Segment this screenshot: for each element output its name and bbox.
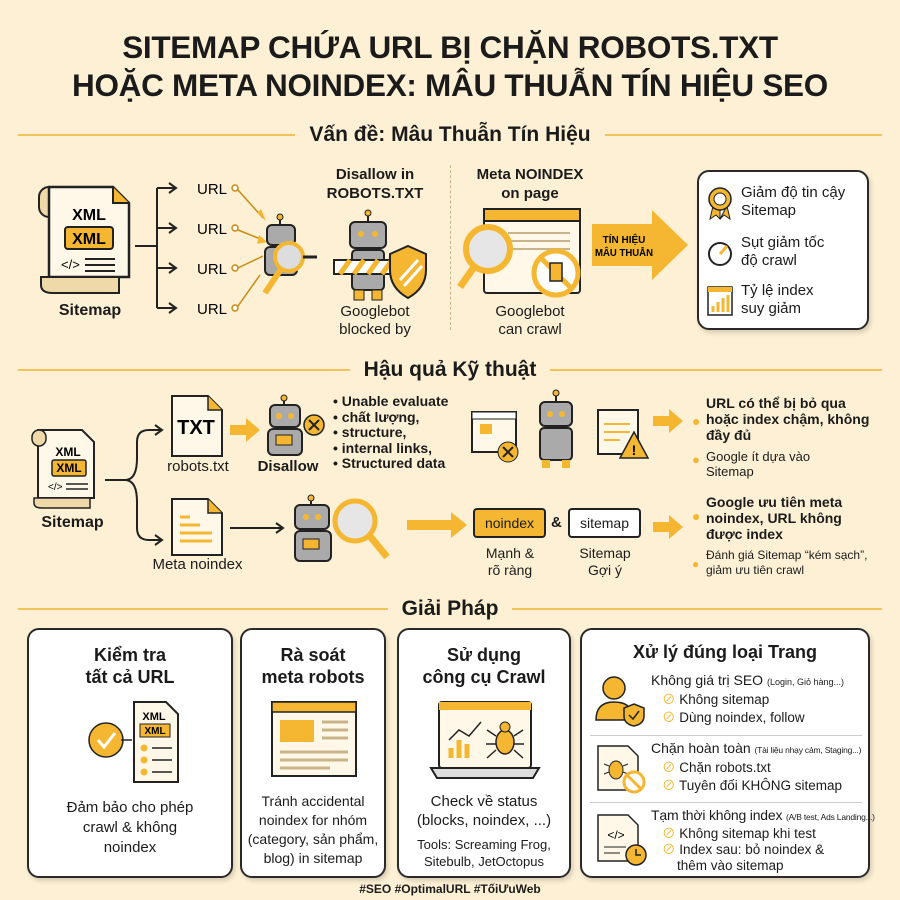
arrow thin [230, 522, 285, 534]
row: no SEO value: ⊘ Không sitemap [662, 692, 769, 707]
text: consequence 1: ● [692, 413, 700, 429]
row: no SEO value: Không giá trị SEO (Login, Giỏ hàng...) [651, 672, 844, 688]
heading: meta noindex on page: on page [501, 185, 559, 202]
item: trust [708, 184, 846, 220]
icon: robot with pages [471, 390, 650, 468]
icon: robot with pages: ! [632, 442, 636, 458]
icon: check file [88, 701, 179, 783]
label: googlebot blocked by: Googlebot [340, 303, 410, 320]
heading [85, 645, 174, 687]
item: index rate: Tỷ lệ index [741, 282, 814, 299]
label: Sitemap: Sitemap [59, 302, 121, 319]
icon: meta noindex doc [171, 498, 223, 556]
icon: laptop with spider [429, 700, 541, 785]
tools: Tools: Screaming Frog, [417, 837, 551, 852]
icon: sitemap scroll: </> [61, 257, 80, 272]
tools: Sitebulb, JetOctopus [424, 854, 544, 869]
icon: robot with magnifier [294, 494, 390, 562]
text: consequence 2 [692, 494, 867, 577]
text: consequence 1: URL có thể bị bỏ qua hoặc index chậm, không đầy đủ [706, 395, 869, 443]
list: unable to evaluate: • Unable evaluate [333, 393, 448, 409]
text: consequence 1: Google ít dựa vào Sitemap [706, 449, 810, 479]
row: block completely [582, 738, 868, 800]
label: strong clear [486, 545, 534, 578]
heading: Kiểm tra [94, 645, 166, 665]
row: temporary noindex: ⊘ Không sitemap khi test [662, 826, 816, 841]
heading: disallow in robots.txt: Disallow in [336, 166, 414, 183]
text: Đảm bảo cho phép [67, 799, 193, 816]
list: unable to evaluate: • structure, [333, 424, 406, 440]
icon: check file: XML [144, 726, 166, 737]
icon: sitemap scroll [38, 186, 130, 294]
badge: noindex [473, 508, 546, 538]
item: index rate: suy giảm [741, 300, 801, 317]
icon: sitemap small: </> [48, 482, 63, 493]
label: strong clear: Mạnh & [486, 545, 534, 561]
row: block completely: Chặn hoàn toàn (Tài liệu nhạy cảm, Staging...) [651, 740, 861, 756]
text: noindex [104, 839, 156, 856]
item: crawl speed [708, 234, 824, 269]
heading: tất cả URL [85, 667, 174, 687]
list: unable to evaluate: • internal links, [333, 440, 432, 456]
text: consequence 1 [692, 395, 869, 479]
badge: sitemap: sitemap [580, 515, 629, 531]
text: Tránh accidental noindex for nhóm (category, sản phẩm, blog) in sitemap [248, 793, 378, 866]
arrows: url branches [135, 181, 266, 318]
text: (blocks, noindex, ...) [417, 812, 551, 829]
panel: handle page types [580, 628, 870, 878]
item: crawl speed: Sụt giảm tốc [741, 234, 824, 251]
icon: page layout [271, 701, 357, 777]
label: googlebot can crawl: Googlebot [495, 303, 565, 320]
icon: small robot with magnifier [262, 214, 317, 294]
arrows: url branches: URL [197, 261, 227, 278]
text: consequence 2: ● [692, 557, 699, 571]
section heading: problem: Vấn đề: Mâu Thuẫn Tín Hiệu [309, 123, 591, 146]
heading: meta robots [261, 667, 365, 687]
row: temporary noindex: ⊘ Index sau: bỏ noindex & [662, 842, 824, 857]
label: googlebot blocked by: blocked by [339, 321, 411, 338]
item: trust: Giảm độ tin cậy [741, 184, 845, 201]
heading: Sử dụng [447, 645, 521, 665]
text: crawl & không [83, 819, 177, 836]
title: HOẶC META NOINDEX: MÂU THUẪN TÍN HIỆU SEO [72, 67, 828, 103]
icon: txt file: TXT [177, 417, 215, 439]
icon: browser with magnifier and hand [457, 208, 581, 298]
row: temporary noindex: thêm vào sitemap [677, 858, 784, 873]
row: temporary noindex: </> [607, 828, 625, 842]
arrow: conflicting signal [592, 210, 688, 280]
ampersand: & [551, 514, 562, 531]
heading: công cụ Crawl [422, 667, 546, 687]
badge: sitemap [568, 508, 641, 538]
row: block completely: ⊘ Chặn robots.txt [662, 760, 771, 775]
row: no SEO value: ⊘ Dùng noindex, follow [662, 710, 805, 725]
label: sitemap hint: Sitemap [579, 545, 631, 561]
label: googlebot can crawl: can crawl [498, 321, 562, 338]
label: robots.txt: robots.txt [167, 458, 229, 475]
arrows: url branches: URL [197, 181, 227, 198]
list: unable to evaluate: • Structured data [333, 455, 445, 471]
list: unable to evaluate: • chất lượng, [333, 409, 419, 425]
label: googlebot can crawl [495, 303, 565, 338]
heading: Rà soát [280, 645, 346, 665]
list: unable to evaluate [333, 393, 448, 471]
arrow [653, 409, 683, 433]
arrow [653, 515, 683, 539]
label: meta noindex: Meta noindex [152, 556, 243, 573]
icon: sitemap small: XML [55, 445, 81, 459]
text [399, 792, 569, 830]
title: SITEMAP CHỨA URL BỊ CHẶN ROBOTS.TXT [122, 29, 778, 65]
heading [422, 645, 546, 687]
label: sitemap hint [579, 545, 631, 578]
arrow thick [407, 512, 467, 538]
icon: sitemap scroll: XML [72, 231, 106, 248]
text: Check về status [431, 793, 537, 810]
label: disallow: Disallow [258, 458, 318, 475]
text: consequence 2: Đánh giá Sitemap “kém sạch”, giảm ưu tiên crawl [706, 548, 867, 577]
arrow [230, 418, 260, 442]
row: block completely: ⊘ Tuyên đối KHÔNG sitemap [662, 778, 842, 793]
text: consequence 2: Google ưu tiên meta noindex, URL không được index [706, 494, 842, 542]
heading: disallow in robots.txt [327, 166, 424, 202]
icon: robot disallow [267, 394, 325, 456]
icon: sitemap small [31, 429, 95, 509]
hashtags: #SEO #OptimalURL #TốiƯuWeb [359, 882, 541, 896]
panel: use crawl tool [397, 628, 571, 878]
row: temporary noindex [582, 805, 868, 877]
text: consequence 1: ● [692, 452, 700, 467]
icon: robot with barrier and shield [333, 210, 427, 300]
heading: meta noindex on page: Meta NOINDEX [477, 166, 583, 183]
item: crawl speed: độ crawl [741, 252, 797, 269]
item: index rate [707, 282, 814, 317]
badge: noindex: noindex [485, 515, 534, 531]
arrows: url branches: URL [197, 301, 227, 318]
icon: txt file [171, 395, 223, 457]
label: sitemap hint: Gợi ý [588, 562, 622, 578]
label: googlebot blocked by [339, 303, 411, 338]
label: strong clear: rõ ràng [488, 562, 532, 578]
panel: review meta robots [240, 628, 386, 878]
label: sitemap: Sitemap [41, 514, 104, 531]
text [66, 799, 193, 856]
panel: check all URLs [27, 628, 233, 878]
panel: consequences summary [697, 170, 869, 330]
section heading: technical consequences: Hậu quả Kỹ thuật [364, 358, 536, 381]
item: trust: Sitemap [741, 202, 796, 219]
section heading: solutions: Giải Pháp [402, 597, 498, 620]
heading: meta noindex on page [477, 166, 584, 202]
arrows: branch [105, 424, 164, 546]
heading: Xử lý đúng loại Trang [633, 642, 817, 662]
heading [261, 645, 365, 687]
icon: sitemap scroll: XML [72, 207, 106, 224]
text: consequence 2: ● [692, 508, 700, 524]
title [72, 29, 828, 103]
row: no SEO value [582, 670, 868, 732]
icon: check file: XML [142, 711, 166, 723]
divider dashed [450, 165, 451, 330]
icon: sitemap small: XML [56, 461, 82, 475]
arrow: conflicting signal: MÂU THUẪN [595, 246, 653, 259]
row: temporary noindex: Tạm thời không index (A/B test, Ads Landing...) [651, 807, 875, 823]
tools [399, 836, 569, 870]
arrow: conflicting signal: TÍN HIỆU [603, 233, 645, 246]
arrows: url branches: URL [197, 221, 227, 238]
heading: disallow in robots.txt: ROBOTS.TXT [327, 185, 423, 202]
